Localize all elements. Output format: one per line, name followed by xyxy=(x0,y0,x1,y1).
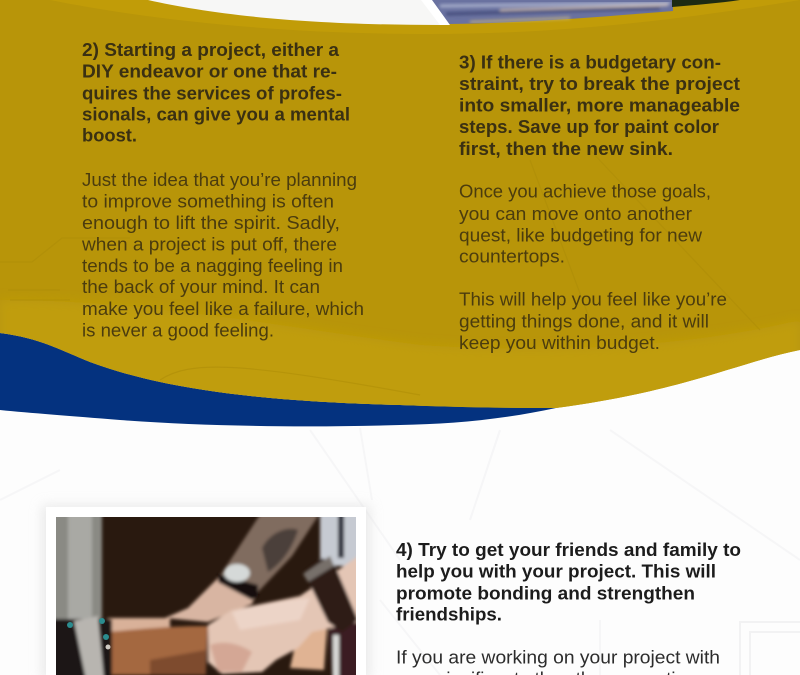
tip 2 body: is never a good feeling. xyxy=(82,320,274,341)
tip 3 body xyxy=(459,181,727,353)
tip 2 heading xyxy=(82,39,350,146)
tattooed arm xyxy=(220,510,322,592)
tip 2 body: when a project is put off, there xyxy=(81,234,337,255)
tip 4 heading: 4) Try to get your friends and family to xyxy=(396,539,741,560)
tip 4 heading: promote bonding and strengthen xyxy=(396,582,695,603)
white photo frame xyxy=(46,507,366,675)
white paper curve at top xyxy=(148,0,446,25)
tip 2 heading: sionals, can give you a mental xyxy=(82,104,350,125)
panel: gold section xyxy=(0,0,800,420)
white frame edge beside solar photo xyxy=(421,0,450,25)
panel: navy wave xyxy=(0,333,556,426)
tip 2 body: enough to lift the spirit. Sadly, xyxy=(82,212,340,233)
front forearm and fist xyxy=(208,555,360,674)
photo frame shadow xyxy=(42,505,370,675)
back watch xyxy=(218,574,258,600)
tip 2 body: the back of your mind. It can xyxy=(82,276,320,297)
text block: tip 2 xyxy=(81,39,364,341)
text block: tip 3 xyxy=(459,51,740,353)
photo: solar panels at top xyxy=(423,0,740,24)
tip 3 heading: into smaller, more manageable xyxy=(459,95,740,116)
tip 2 body: tends to be a nagging feeling in xyxy=(82,255,343,276)
tip 4 heading xyxy=(396,539,741,625)
tip 3 body: This will help you feel like you’re xyxy=(459,289,727,310)
tip 4 heading: friendships. xyxy=(396,604,502,625)
tip 3 body: getting things done, and it will xyxy=(459,310,709,331)
dark photo background xyxy=(99,517,345,675)
tip 3 body: Once you achieve those goals, xyxy=(459,181,711,202)
wrist behind fist xyxy=(290,628,327,670)
tip 3 body: you can move onto another xyxy=(459,203,692,224)
tip 2 heading: boost. xyxy=(82,125,137,146)
tip 2 body: Just the idea that you’re planning xyxy=(82,169,357,190)
gold faint blueprint details xyxy=(0,150,760,395)
blueprint background pattern xyxy=(0,428,800,675)
photo: hands fist bump xyxy=(46,507,366,675)
gold lighter lower band xyxy=(0,311,800,408)
tip 2 heading: 2) Starting a project, either a xyxy=(82,39,340,60)
tip 3 heading: straint, try to break the project xyxy=(459,73,740,94)
tip 2 heading: DIY endeavor or one that re- xyxy=(82,61,337,82)
tip 3 body: keep you within budget. xyxy=(459,332,660,353)
panel streaks xyxy=(440,3,670,22)
tip 4 body: If you are working on your project with xyxy=(396,646,720,667)
tip 2 body: to improve something is often xyxy=(82,191,334,212)
tip 2 body xyxy=(81,169,364,341)
leather watch strap xyxy=(304,558,358,632)
back hand xyxy=(165,578,258,622)
tip 3 heading: 3) If there is a budgetary con- xyxy=(459,51,721,72)
tip 4 heading: help you with your project. This will xyxy=(396,561,716,582)
brown forearm and hand xyxy=(108,626,208,675)
lower left skin xyxy=(105,616,172,634)
tip 2 heading: quires the services of profes- xyxy=(82,82,342,103)
beaded bracelets xyxy=(50,619,112,675)
tip 3 body: countertops. xyxy=(459,246,565,267)
tip 3 heading xyxy=(459,51,740,159)
tip 2 body: make you feel like a failure, which xyxy=(82,298,364,319)
tip 3 heading: first, then the new sink. xyxy=(459,138,673,159)
tip 3 body: quest, like budgeting for new xyxy=(459,225,703,246)
dark green tree edge xyxy=(672,0,740,7)
tip 3 heading: steps. Save up for paint color xyxy=(459,116,719,137)
text block: tip 4 xyxy=(396,539,741,675)
gold lighter highlight along the top curve xyxy=(50,0,800,34)
